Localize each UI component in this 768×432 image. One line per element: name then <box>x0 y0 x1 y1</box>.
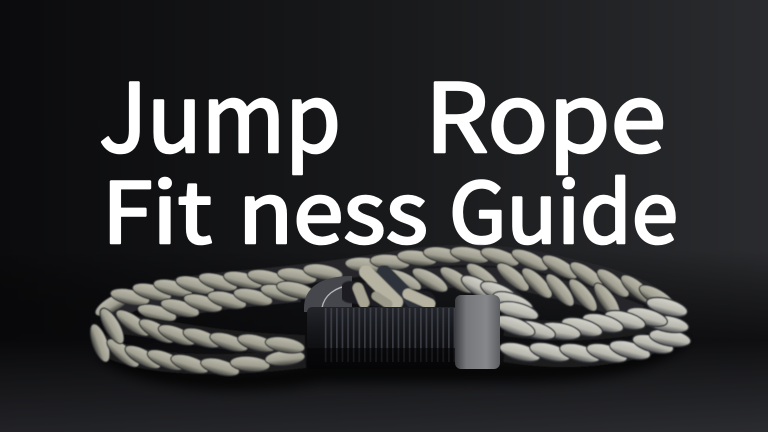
ribbed grip <box>307 307 472 369</box>
left front lower strand <box>86 322 306 379</box>
title: Rope <box>425 43 666 180</box>
title <box>99 43 678 268</box>
title: Fit <box>102 147 212 268</box>
dark rope core <box>108 255 668 318</box>
right inner loop <box>458 271 540 324</box>
metal collar <box>455 295 500 369</box>
rope coil front <box>86 294 692 379</box>
rope coil back <box>92 244 688 380</box>
back strand lower <box>136 258 625 325</box>
back strand upper <box>92 244 688 320</box>
right front lower strand <box>498 326 692 366</box>
knot <box>350 272 430 304</box>
table surface <box>0 250 768 432</box>
title: ness <box>238 147 428 268</box>
dark front core <box>100 318 672 364</box>
title: Jump <box>99 43 341 180</box>
rope handle <box>304 272 500 369</box>
title: Guide <box>449 147 678 268</box>
rear ring <box>304 276 352 312</box>
left front upper strand <box>96 305 306 356</box>
right front upper strand <box>493 294 690 343</box>
rope shadow <box>105 335 680 380</box>
